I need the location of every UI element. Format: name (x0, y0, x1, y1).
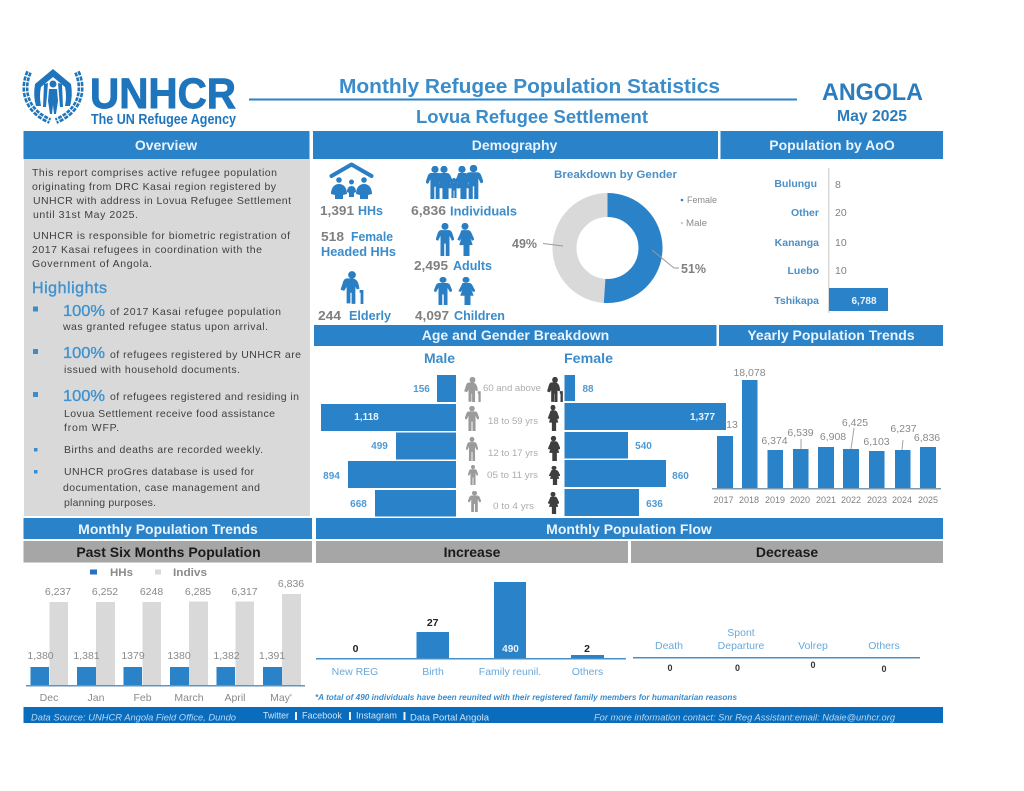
chart: decrease: 0 (735, 663, 740, 673)
icons: female age groups (548, 377, 562, 514)
legend (681, 195, 717, 228)
icon: elderly person (341, 271, 363, 304)
footnote: *A total of 490 individuals have been reunited with their registered family members for humanitarian reasons (315, 693, 738, 702)
bar chart: male by age: 1,118 (354, 412, 379, 423)
text block: overview paragraph 1: UNHCR with address in Lovua Refugee Settlement (33, 195, 291, 207)
bar chart: six months: 1,382 (213, 650, 240, 662)
bar chart: six months: Dec (40, 692, 58, 704)
bar chart: yearly population: 6,237 (890, 423, 917, 435)
bar chart: area of origin: Other (791, 207, 819, 219)
text block: overview paragraph 1: This report comprises active refugee population (32, 167, 277, 179)
heading: overview: Overview (135, 137, 197, 153)
subheading: increase (316, 541, 628, 563)
bar chart: increase: 27 (427, 617, 439, 629)
highlight 5: planning purposes. (64, 497, 156, 509)
heading: age and gender: Age and Gender Breakdown (422, 327, 609, 343)
highlight 2: of refugees registered by UNHCR are (110, 349, 301, 361)
chart: decrease: Others (868, 640, 900, 652)
bar chart: yearly population: 2019 (765, 495, 785, 505)
subtitle: Lovua Refugee Settlement (416, 107, 648, 127)
bar chart: six months: 1,380 (27, 650, 54, 662)
heading: yearly trends: Yearly Population Trends (747, 327, 915, 343)
chart: decrease (633, 627, 920, 674)
age labels: 12 to 17 yrs (488, 448, 539, 458)
logo wordmark: UNHCR (90, 70, 236, 118)
heading: monthly trends (24, 518, 312, 539)
bar chart: female by age: 88 (582, 384, 594, 395)
bar chart: male by age (321, 375, 456, 516)
bar chart: six months: 6,252 (92, 586, 118, 598)
heading: monthly trends: Monthly Population Trends (78, 521, 258, 537)
panel: overview (24, 131, 310, 516)
footer: data source: Data Source: UNHCR Angola Field Office, Dundo (31, 712, 236, 724)
heading: population by AoO (720, 131, 943, 159)
bar chart: six months: May' (270, 692, 292, 704)
highlight 5: UNHCR proGres database is used for (64, 466, 254, 478)
panel: monthly population trends (24, 518, 312, 704)
bar chart: six months: April (224, 692, 246, 704)
logo tagline: The UN Refugee Agency (91, 112, 236, 128)
bar chart: increase: Birth (422, 666, 444, 678)
legend: Indivs (173, 567, 207, 579)
bar chart: area of origin: Kananga (775, 237, 819, 249)
subheading: past six months (24, 541, 312, 562)
donut ring (564, 205, 650, 291)
text block: overview paragraph 2: Government of Angola. (32, 258, 152, 270)
heading: demography: Demography (472, 137, 557, 153)
text block: overview paragraph 2: UNHCR is responsible for biometric registration of (33, 230, 290, 242)
bar chart: yearly population: 2025 (918, 495, 938, 505)
bar chart: six months: 1380 (167, 650, 191, 662)
text block: overview paragraph 1 (32, 167, 291, 221)
highlight 4: Births and deaths are recorded weekly. (64, 444, 263, 456)
highlight 1: of 2017 Kasai refugee population (110, 306, 281, 318)
label: male: Male (424, 350, 455, 366)
bar chart: yearly population: 2021 (816, 495, 836, 505)
highlight 3: Lovua Settlement receive food assistance (64, 408, 275, 420)
bar chart: six months: 6,285 (185, 586, 211, 598)
stat: adults (414, 223, 492, 273)
legend (90, 567, 207, 579)
bar chart: yearly population: 6,539 (787, 427, 814, 439)
icon: group of people (426, 165, 483, 199)
age labels: 0 to 4 yrs (493, 501, 535, 511)
footer: social links: Data Portal Angola (410, 712, 490, 724)
label: female share: 51% (681, 262, 706, 276)
icon: children (434, 277, 475, 305)
bar chart: six months (26, 578, 305, 704)
bar chart: yearly population: 2020 (790, 495, 810, 505)
heading: population by AoO: Population by AoO (769, 137, 895, 153)
icons: male age groups (465, 377, 481, 512)
panel: yearly population trends (712, 325, 943, 505)
highlight 3: of refugees registered and residing in (110, 391, 299, 403)
highlight 5 (34, 466, 260, 509)
bar chart: increase: 2 (584, 643, 590, 655)
label: female: Female (564, 350, 613, 366)
subheading: increase: Increase (444, 544, 501, 560)
bar chart: yearly population (712, 367, 941, 505)
text block: overview paragraph 2 (32, 230, 290, 270)
subheading: decrease (631, 541, 943, 563)
legend: Male (686, 218, 707, 228)
label: male share: 49% (512, 237, 537, 251)
chart: decrease: 0 (667, 663, 673, 673)
stat: elderly (318, 271, 391, 323)
stat: individuals: Individuals (450, 204, 517, 218)
bar chart: female by age: 860 (672, 471, 689, 482)
bar chart: increase: 0 (353, 643, 359, 655)
highlight 2: issued with household documents. (64, 364, 240, 376)
bar chart: yearly population: 2022 (841, 495, 861, 505)
bar chart: male by age: 156 (413, 384, 430, 395)
bar chart: area of origin: 10 (835, 237, 847, 249)
highlight 2: 100% (63, 345, 105, 362)
icon: household (331, 164, 372, 199)
heading: demography (313, 131, 718, 159)
heading: overview (24, 131, 310, 159)
bar chart: male by age: 894 (323, 471, 340, 482)
logo: UNHCR (25, 69, 236, 128)
stat: households: HHs (358, 204, 383, 218)
chart title: Breakdown by Gender (554, 169, 678, 181)
stat: female headed households (321, 230, 396, 259)
chart: decrease: Departure (718, 640, 764, 652)
bar chart: area of origin: 10 (835, 265, 847, 277)
bar chart: increase (316, 582, 626, 678)
bar chart: female by age: 540 (635, 441, 652, 452)
legend: Female (687, 195, 717, 205)
label: female share (652, 250, 706, 276)
bar chart: yearly population: 6,425 (842, 417, 868, 429)
footer: social links: Twitter (263, 710, 289, 722)
country heading: ANGOLA (822, 79, 923, 106)
text block: overview paragraph 1: originating from DRC Kasai region registered by (32, 181, 277, 193)
footer: social links (263, 710, 490, 724)
highlight 3: 100% (63, 388, 105, 405)
bar chart: six months: 6,317 (231, 586, 258, 598)
bar chart: six months: March (174, 692, 204, 704)
highlight 3: from WFP. (64, 422, 119, 434)
bar chart: area of origin: Bulungu (774, 178, 817, 190)
age labels: 60 and above (483, 383, 541, 393)
stat: children (415, 277, 505, 323)
heading: yearly trends (719, 325, 943, 346)
chart: decrease: Death (655, 640, 683, 652)
highlight 1: was granted refugee status upon arrival. (62, 321, 268, 333)
bar chart: six months: 1,381 (73, 650, 100, 662)
panel: population by AoO (720, 131, 943, 313)
panel: monthly population flow (315, 518, 943, 702)
age labels: 18 to 59 yrs (488, 416, 539, 426)
stat: elderly: 244 (318, 309, 341, 323)
footer: social links: Facebook (302, 710, 342, 722)
stat: female headed households: 518 (321, 230, 344, 244)
chart: decrease: Spont (727, 627, 755, 639)
bar chart: yearly population: 6,374 (761, 435, 788, 447)
bar chart: yearly population: 2024 (892, 495, 912, 505)
bar chart: six months: Jan (88, 692, 105, 704)
panel: age and gender breakdown (314, 325, 726, 516)
stat: children: Children (454, 309, 505, 323)
stat: adults: 2,495 (414, 259, 448, 273)
bar chart: yearly population: 18,078 (733, 367, 766, 379)
footer: social links: Instagram (356, 710, 397, 722)
bar chart: increase: Family reunil. (479, 666, 541, 678)
bar chart: female by age: 1,377 (690, 412, 715, 423)
highlight 5: documentation, case management and (63, 482, 260, 494)
stat: individuals: 6,836 (411, 204, 446, 218)
label: male share (512, 237, 563, 251)
bar chart: area of origin: 20 (835, 207, 847, 219)
report date: May 2025 (837, 108, 907, 125)
bar chart: six months: 1379 (121, 650, 145, 662)
bar chart: increase: Others (572, 666, 603, 678)
bar chart: yearly population: 6,836 (914, 432, 940, 444)
age labels: 05 to 11 yrs (487, 470, 539, 480)
title: Monthly Refugee Population Statistics (339, 76, 720, 98)
stat: individuals (411, 165, 517, 218)
heading: age and gender (314, 325, 716, 346)
bar chart: six months: 6,836 (278, 578, 304, 590)
icon: adults (436, 223, 474, 256)
bar chart: increase: New REG (332, 666, 378, 678)
legend: HHs (110, 567, 133, 579)
bar chart: six months: Feb (133, 692, 152, 704)
bar chart: male by age: 499 (371, 441, 388, 452)
icon: UNHCR emblem (25, 69, 81, 121)
highlight 3 (33, 388, 299, 434)
chart: decrease: 0 (810, 660, 816, 670)
stat: female headed households: Headed HHs (321, 245, 396, 259)
stat: elderly: Elderly (349, 309, 391, 323)
bar chart: yearly population: 2018 (739, 495, 759, 505)
panel: demography (313, 131, 718, 323)
highlight 2 (33, 345, 301, 376)
age labels (483, 383, 541, 511)
text block: overview paragraph 1: until 31st May 2025. (33, 209, 138, 221)
bar chart: yearly population: 2023 (867, 495, 887, 505)
bar chart: yearly population: 13 (726, 419, 738, 431)
highlight 1: 100% (63, 303, 105, 320)
heading: monthly flow: Monthly Population Flow (546, 521, 712, 537)
bar chart: area of origin: 8 (835, 179, 841, 191)
bar chart: yearly population: 6,103 (863, 436, 890, 448)
stat: households (320, 164, 383, 218)
chart: decrease: 0 (881, 664, 887, 674)
highlight 1 (33, 303, 281, 333)
bar chart: six months: 6248 (140, 586, 163, 598)
stat: adults: Adults (453, 259, 492, 273)
bar chart: area of origin: Luebo (788, 265, 819, 277)
bar chart: six months: 1,391 (259, 650, 285, 662)
stat: female headed households: Female (351, 230, 393, 244)
subheading: decrease: Decrease (756, 544, 818, 560)
bar chart: area of origin: Tshikapa (774, 295, 819, 307)
text block: overview paragraph 2: 2017 Kasai refugees in coordination with the (32, 244, 262, 256)
bar chart: yearly population: 6,908 (820, 431, 846, 443)
footer (24, 707, 943, 724)
heading: highlights: Highlights (32, 280, 107, 297)
bar chart: six months: 6,237 (45, 586, 71, 598)
bar chart: increase: 490 (502, 644, 519, 655)
chart: breakdown by gender donut (512, 169, 717, 291)
stat: children: 4,097 (415, 309, 449, 323)
bar chart: yearly population: 2017 (713, 495, 734, 505)
bar chart: area of origin (774, 168, 888, 313)
bar chart: female by age (564, 375, 726, 516)
bar chart: area of origin: 6,788 (851, 296, 877, 307)
subheading: past six months: Past Six Months Population (76, 544, 261, 560)
heading: monthly flow (316, 518, 943, 539)
stat: households: 1,391 (320, 204, 354, 218)
chart: decrease: Volrep (798, 640, 828, 652)
bar chart: female by age: 636 (646, 499, 663, 510)
footer: contact: For more information contact: Snr Reg Assistant:email: Ndaie@unhcr.org (594, 712, 896, 724)
bar chart: male by age: 668 (350, 499, 367, 510)
